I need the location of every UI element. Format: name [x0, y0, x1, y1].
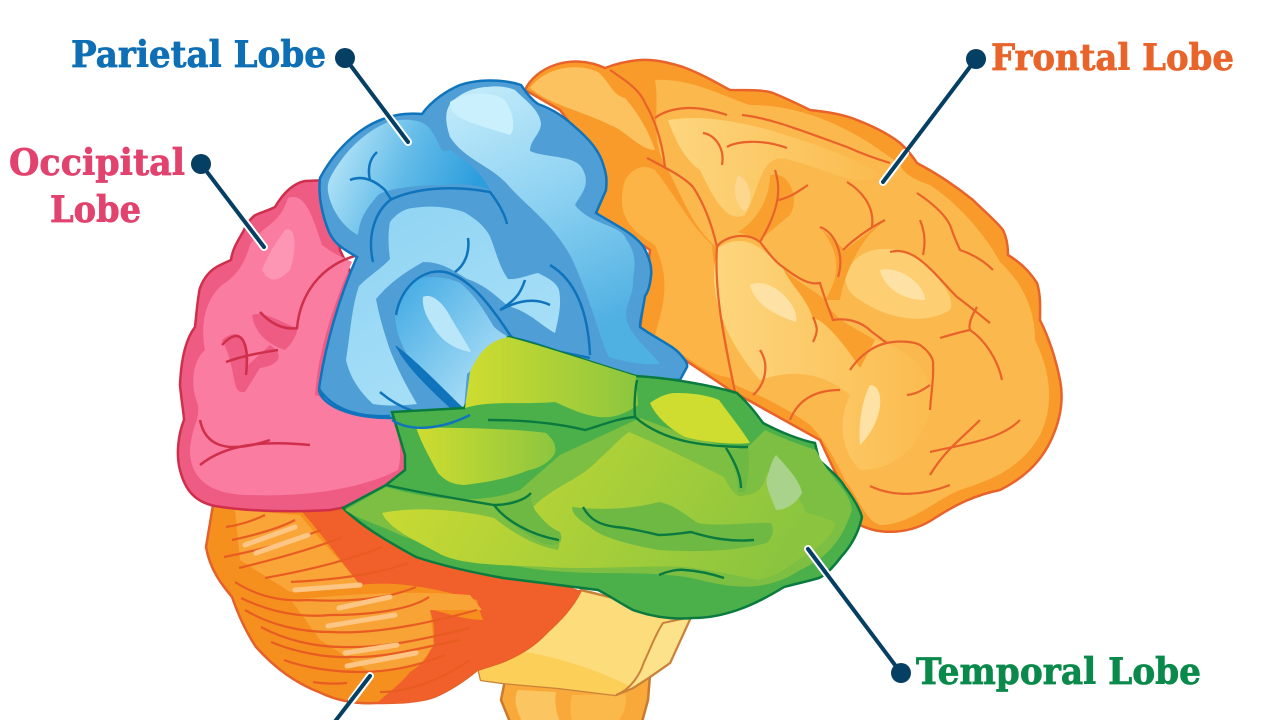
brain stem: [477, 590, 691, 720]
label: Frontal Lobe: [883, 37, 1234, 182]
cerebellum: [206, 505, 580, 703]
occipital lobe: [178, 180, 410, 511]
temporal lobe: [343, 337, 862, 619]
pointer: cerebellum: [333, 676, 370, 720]
label: Occipital Lobe: Lobe: [50, 189, 141, 231]
label: Parietal Lobe: Parietal Lobe: [71, 34, 326, 76]
label: Frontal Lobe: Frontal Lobe: [991, 37, 1234, 79]
label: Parietal Lobe: [71, 34, 408, 142]
frontal lobe: [525, 60, 1062, 532]
parietal lobe: [319, 80, 687, 418]
label: Temporal Lobe: Temporal Lobe: [916, 651, 1201, 693]
label: Occipital Lobe: [9, 142, 264, 247]
label: Occipital Lobe: Occipital: [9, 142, 185, 184]
label: Temporal Lobe: [808, 549, 1201, 693]
